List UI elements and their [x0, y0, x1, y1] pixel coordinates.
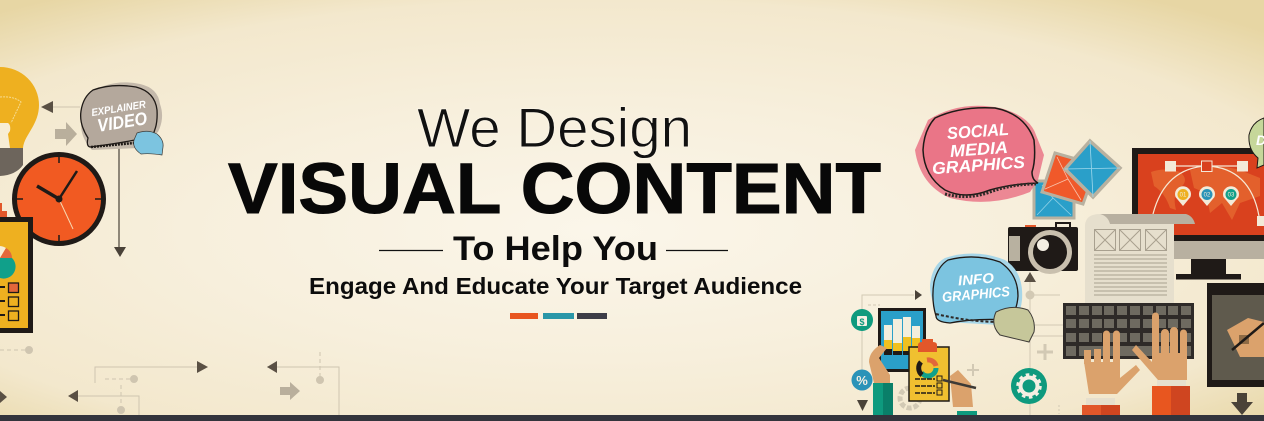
colour bars: [510, 313, 607, 319]
text: graphics: GRAPHICS: [931, 153, 1026, 178]
icon: tablet chart: [880, 310, 924, 370]
vector handle: [1153, 166, 1259, 216]
world map: [1151, 166, 1260, 220]
text: social: SOCIAL: [946, 120, 1010, 143]
left small arrows: [0, 361, 300, 403]
bubble: explainer video: [81, 82, 163, 155]
icon: typing hand right: [1132, 313, 1190, 415]
icon: monitor: 02: [1204, 192, 1211, 198]
icon: paper layout: [1085, 214, 1195, 303]
icon: money circle: $: [859, 317, 865, 327]
icon: clock: [14, 154, 104, 244]
icon: clipboard: [0, 203, 30, 330]
icon: grey gear: [900, 388, 920, 408]
icon: orange envelope: [1042, 153, 1097, 204]
icon: money circle: [851, 309, 873, 331]
subtitle: to help you: To Help You: [453, 230, 658, 268]
icon: yellow clipboard: [909, 339, 949, 401]
icon: right hand with pen: [943, 370, 977, 415]
icon: percent circle: [852, 370, 872, 390]
icon: lower blue envelope: [1034, 181, 1074, 218]
text: media: MEDIA: [949, 138, 1009, 161]
arrow: grey block: [55, 122, 77, 146]
icon: drawing tablet: [1207, 283, 1264, 387]
icon: percent circle: %: [856, 373, 868, 388]
bubble: partial green top right: [1249, 118, 1264, 168]
icon: light bulb: [0, 67, 39, 176]
text: explainer: EXPLAINER: [91, 99, 147, 119]
icon: camera: [1008, 223, 1078, 274]
bubble: info graphics: [930, 253, 1022, 325]
arrow: down from video bubble: [114, 147, 126, 257]
icon: monitor: 03: [1228, 192, 1235, 198]
bubble: small green: [994, 307, 1034, 342]
text: graphics: GRAPHICS: [941, 283, 1011, 305]
icon: typing hand left: [1082, 330, 1140, 415]
arrow: to bulb: [41, 101, 80, 113]
icon: teal gear: [1011, 368, 1047, 404]
arrow: down right: [1231, 393, 1253, 415]
icon: left hand and sleeve: [869, 345, 893, 415]
small blue bubble: [134, 131, 163, 155]
right connector decorations: [862, 280, 1066, 415]
left connector decorations: [0, 346, 339, 415]
text: info: INFO: [957, 269, 995, 289]
icon: monitor: [1132, 148, 1264, 280]
icon: right small triangles: [857, 272, 1036, 411]
icon: monitor: 01: [1180, 192, 1187, 198]
title: visual content: VISUAL CONTENT: [228, 150, 881, 229]
icon: keyboard: [1063, 303, 1194, 359]
bottom bar: [0, 415, 1264, 421]
icon: blue diamond envelope: [1065, 141, 1120, 197]
title: we design: We Design: [417, 96, 692, 159]
text: video: VIDEO: [96, 108, 148, 136]
map pins: [1175, 186, 1191, 206]
bubble: social media graphics: [915, 106, 1044, 202]
tagline: Engage And Educate Your Target Audience: [309, 273, 802, 299]
